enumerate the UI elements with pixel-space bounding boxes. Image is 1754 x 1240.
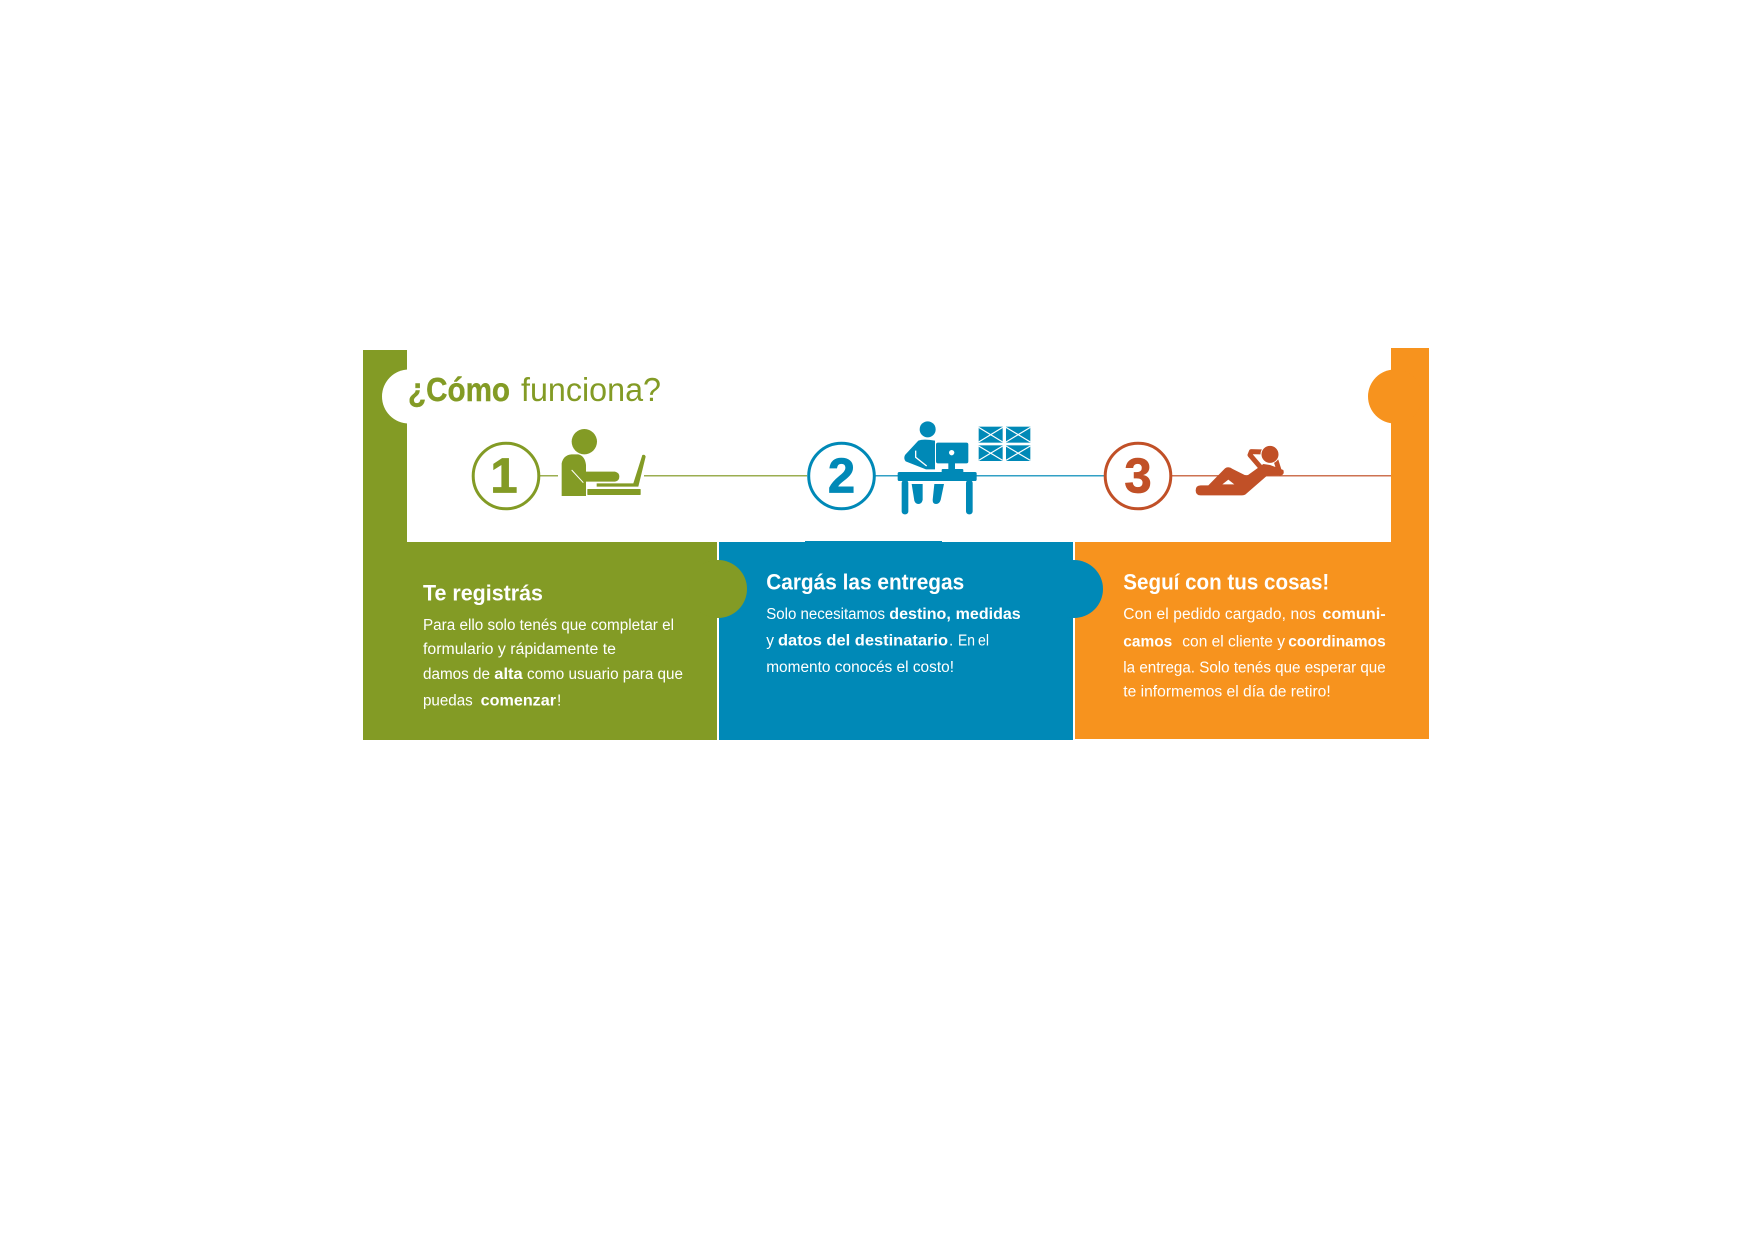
puzzle tab: green into blue [689, 560, 747, 618]
body text: step 2: destino, [889, 606, 951, 623]
body text: step 1: formulario y rápidamente te [423, 641, 616, 658]
text block: step 1 [423, 581, 683, 710]
step number 2 [809, 443, 874, 509]
heading: Cargás las entregas: Cargás las entregas [766, 570, 964, 594]
title: funciona? [521, 371, 661, 408]
step number 1 [473, 443, 539, 509]
body text: step 1: ! [557, 693, 561, 710]
body text: step 1: como usuario para que [527, 666, 683, 683]
body text: step 2: En [958, 633, 975, 650]
heading: Seguí con tus cosas!: Seguí con tus cosas! [1123, 570, 1329, 594]
body text: step 2 [766, 606, 1021, 676]
body text: step 3: la entrega. Solo tenés que esperar que [1123, 659, 1386, 676]
body text: step 3: Con el pedido cargado, nos [1123, 606, 1316, 623]
body text: step 1: puedas [423, 693, 473, 710]
body text: step 2: Solo necesitamos [766, 606, 885, 623]
body text: step 1 [423, 617, 683, 710]
body text: step 3 [1123, 606, 1386, 701]
body text: step 2: . [949, 633, 953, 650]
step number 2: 2 [828, 449, 855, 503]
text block: step 3 [1123, 570, 1386, 701]
connector line: step 2 [875, 475, 1104, 477]
body text: step 2: y [766, 633, 774, 650]
connector line: step 1 [539, 475, 807, 477]
heading: Te registrás: Te registrás [423, 581, 543, 606]
body text: step 3: con el cliente y [1182, 634, 1285, 651]
title [408, 371, 661, 408]
step number 1: 1 [490, 449, 518, 503]
body text: step 2: medidas [956, 606, 1021, 623]
body text: step 2: datos del destinatario [778, 633, 948, 650]
icon: person with laptop [562, 429, 646, 496]
icon: stacked packages [979, 427, 1030, 461]
connector line: step 3 [1172, 475, 1391, 477]
body text: step 1: comenzar [481, 693, 556, 710]
body text: step 2: el [978, 633, 989, 650]
body text: step 1: damos de [423, 666, 490, 683]
body text: step 2: momento conocés el costo! [766, 659, 954, 676]
icon: reclining person [1196, 445, 1284, 495]
puzzle notch: white cut-out in green column [382, 370, 436, 424]
title: ¿Cómo [408, 371, 510, 408]
body text: step 3: camos [1123, 634, 1172, 651]
step number 3 [1105, 443, 1171, 509]
panel: blue step 2 background [719, 541, 1103, 740]
text block: step 2 [766, 570, 1021, 676]
body text: step 3: te informemos el día de retiro! [1123, 684, 1331, 701]
body text: step 1: Para ello solo tenés que completar el [423, 617, 674, 634]
panel: green step 1 background [363, 350, 717, 740]
panel: orange step 3 background [1075, 348, 1429, 739]
body text: step 1: alta [494, 666, 523, 683]
step number 3: 3 [1124, 449, 1152, 503]
icon: person at desk with computer [898, 421, 977, 514]
body text: step 3: coordinamos [1288, 634, 1386, 651]
body text: step 3: comuni- [1322, 606, 1386, 623]
